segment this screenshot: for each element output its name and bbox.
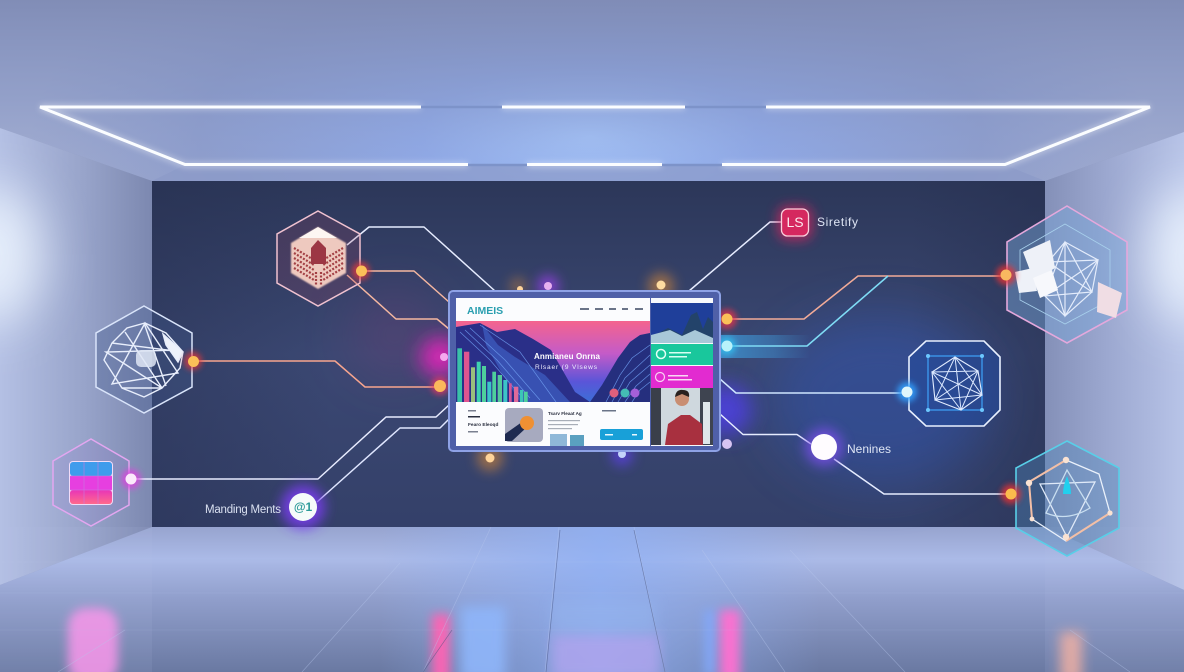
node: top hexagon orange <box>352 262 370 280</box>
connector: logo to screen <box>689 222 781 291</box>
small glow: top left amber <box>517 286 523 292</box>
connector lines <box>131 222 1010 502</box>
hero colour dots <box>610 388 640 398</box>
bottom left text <box>468 410 498 432</box>
node: left hexagon orange <box>184 352 202 370</box>
connector: screen to octagon <box>720 379 907 393</box>
sidebar mountain image <box>651 303 713 343</box>
bottom centre text lines <box>548 420 580 429</box>
ceiling <box>0 0 1184 181</box>
node: right bottom hexagon orange <box>1001 484 1021 504</box>
icon: wire polyhedron in square <box>926 354 984 412</box>
small glow: lower orange <box>486 454 494 462</box>
logo node <box>778 206 812 240</box>
hero mountains <box>456 323 650 402</box>
right top hexagon node: polyhedron and papers <box>1007 206 1127 343</box>
floor reflections <box>68 600 1082 672</box>
connector: orange node to screen <box>362 271 449 302</box>
sidebar green card <box>651 344 713 365</box>
icon: paper cards <box>1015 240 1122 318</box>
hero headline: Anmianeu Onrna <box>534 352 601 361</box>
connector: orange right line <box>727 276 1006 319</box>
node: right orange at screen <box>717 309 737 329</box>
node: right top hexagon orange <box>996 265 1016 285</box>
screen: main page <box>456 298 650 446</box>
hero sub headline: Rlsaer (9 Vlsews <box>535 364 598 371</box>
connector: grid hexagon to screen <box>131 405 449 479</box>
central web screen <box>449 291 720 451</box>
node: octagon <box>897 382 917 402</box>
bottom right button <box>600 410 643 440</box>
screen glows <box>420 273 810 471</box>
node: grid hexagon white <box>121 469 141 489</box>
left wall <box>0 128 152 585</box>
top hexagon node: cube <box>277 211 360 306</box>
small icon: lower right <box>722 439 732 449</box>
Manding Ments node <box>281 485 325 529</box>
screen navigation <box>580 308 643 310</box>
screen logo: AIMEIS <box>467 305 503 317</box>
icon: wire polyhedron <box>1020 224 1110 324</box>
bottom centre thumbnail <box>550 434 584 446</box>
hero bar chart <box>457 348 528 402</box>
screen: sidebar <box>651 298 713 446</box>
small icon: bottom blue <box>618 450 626 458</box>
hero banner <box>456 321 650 402</box>
right bottom hexagon node: pentagon crystal <box>1016 441 1119 556</box>
label: Nenines: Nenines <box>847 442 891 456</box>
connector: left hexagon to screen <box>194 361 440 387</box>
small icon: pink left of screen <box>440 353 448 361</box>
back wall <box>152 181 1045 527</box>
ceiling light strips <box>40 107 1150 165</box>
small icon: top pink <box>544 282 552 290</box>
Nenines node <box>805 428 843 466</box>
bottom centre heading: Tsarv Fleaat Ag <box>548 411 582 416</box>
icon: colour grid <box>69 461 113 505</box>
octagon node: polyhedron <box>909 341 1000 426</box>
small glow: top orange <box>656 280 666 290</box>
connector: top hexagon lower to screen <box>347 275 449 329</box>
junction nodes <box>121 262 1021 504</box>
connector: screen to Nenines node <box>720 414 811 444</box>
node: right cyan at screen <box>718 337 736 355</box>
sidebar portrait photo <box>651 388 713 445</box>
Manding Ments node: @1 <box>294 500 313 514</box>
connector: top hexagon to screen <box>347 227 495 291</box>
icon: wire pentagon <box>1026 457 1113 541</box>
right wall <box>1076 132 1184 590</box>
connector: Manding Ments to screen <box>317 419 449 502</box>
label: Manding Ments: Manding Ments <box>205 504 281 516</box>
icon: geodesic sphere <box>104 323 183 397</box>
node: screen left orange <box>431 377 449 395</box>
thumbnail: hand with orange <box>505 408 543 442</box>
bottom left text: Fearo Eleoqd <box>468 422 498 428</box>
floor <box>0 527 1184 672</box>
label: Siretify: Siretify <box>817 215 858 229</box>
icon: patterned cube <box>291 227 346 289</box>
connector: Nenines node to bottom hexagon <box>834 459 1010 494</box>
connector: cyan right line <box>727 276 888 346</box>
sidebar magenta card <box>651 366 713 388</box>
left hexagon node: geodesic sphere <box>96 306 192 413</box>
logo node: LS <box>786 214 804 230</box>
grid hexagon node: colour swatch <box>53 439 129 526</box>
